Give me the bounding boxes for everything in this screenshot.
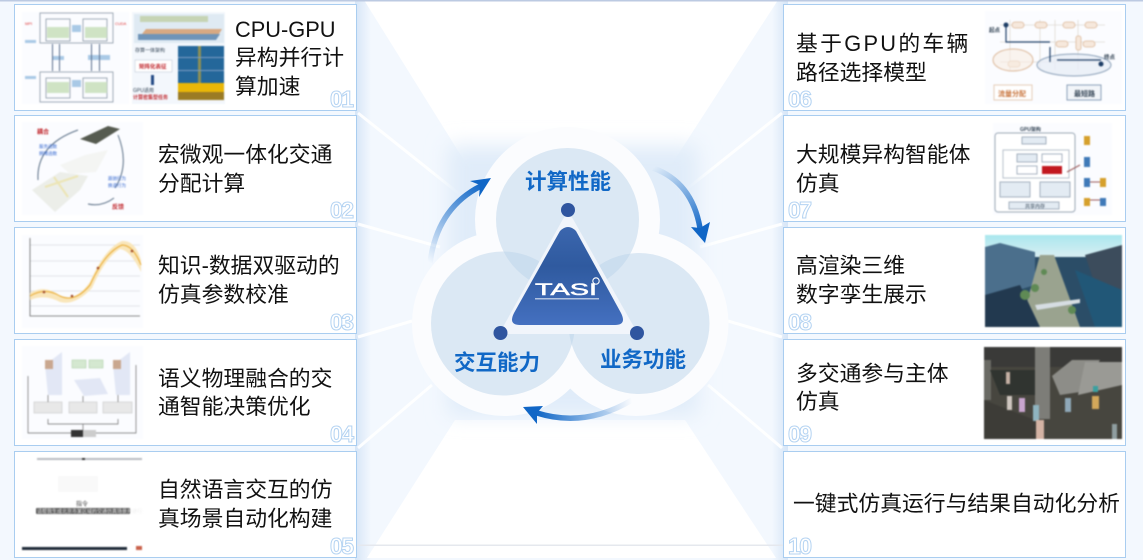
text 07: 仿真 xyxy=(796,171,840,196)
thumbnail 09 xyxy=(984,347,1122,439)
text 04: 通智能决策优化 xyxy=(158,394,311,419)
text 07: 大规模异构智能体 xyxy=(796,142,970,167)
thumbnail 01: 计算密集型任务 xyxy=(133,94,168,101)
thumbnail 01: 存算一体架构 xyxy=(135,47,165,54)
arrow: bottom arc xyxy=(523,399,629,424)
thumbnail 07 xyxy=(993,123,1112,215)
thumbnail 01: 矩阵化表征 xyxy=(139,62,167,70)
text 01: 异构并行计 xyxy=(235,45,344,70)
circle: computing xyxy=(496,148,639,291)
thumbnail 04 xyxy=(22,346,143,439)
thumbnail 01: CUDA xyxy=(115,21,127,26)
text 03: 知识-数据双驱动的 xyxy=(158,253,340,278)
circle: interaction xyxy=(431,252,575,396)
thumbnail 05 xyxy=(22,457,143,550)
text 02 xyxy=(158,142,332,196)
node: top xyxy=(561,203,575,217)
text 08 xyxy=(796,253,927,307)
text 07 xyxy=(796,142,970,196)
text 03: 仿真参数校准 xyxy=(158,282,289,307)
text 06: 路径选择模型 xyxy=(796,60,927,85)
number 06: 06 xyxy=(788,86,811,112)
thumbnail 02: 跟驰行为 xyxy=(108,175,126,182)
text 08: 高渲染三维 xyxy=(796,253,905,278)
node: left xyxy=(494,326,508,340)
text 03 xyxy=(158,253,340,307)
panel: 03 xyxy=(14,227,356,334)
number 10: 10 xyxy=(788,533,811,559)
panel: 10 xyxy=(783,450,1126,558)
text 05: 真场景自动化构建 xyxy=(158,506,332,531)
arrow: left arc xyxy=(428,178,491,260)
number 08: 08 xyxy=(788,309,811,335)
text 05 xyxy=(158,477,332,531)
white discs xyxy=(412,127,728,416)
thumbnail 06 xyxy=(985,11,1122,104)
thumbnail 01: GPU适用 xyxy=(133,87,154,94)
text 08: 数字孪生展示 xyxy=(796,282,927,307)
text 01 xyxy=(235,16,344,99)
logo loop xyxy=(593,278,599,284)
thumbnail 01: MPI xyxy=(25,21,32,26)
thumbnail 02: 耦合 xyxy=(37,128,49,136)
panel: 09 xyxy=(783,339,1126,446)
triangle: logo panel xyxy=(512,227,623,325)
label: computing: 计算性能 xyxy=(525,170,611,194)
thumbnail 06: 流量分配 xyxy=(998,89,1026,98)
text 01: CPU-GPU xyxy=(235,16,336,42)
text 05: 自然语言交互的仿 xyxy=(158,477,332,502)
number 03: 03 xyxy=(330,309,353,335)
triangle frame xyxy=(502,216,635,334)
number 04: 04 xyxy=(330,421,353,447)
panel: 02 xyxy=(14,115,356,222)
number 01: 01 xyxy=(330,86,353,112)
panel: 05 xyxy=(14,450,356,558)
number 02: 02 xyxy=(330,197,353,223)
panel: 04 xyxy=(14,339,356,446)
thumbnail 02 xyxy=(22,122,143,215)
text 06: 基于GPU的车辆 xyxy=(796,31,971,56)
logo text TASI: TASI xyxy=(535,280,597,299)
thumbnail 06: 起点 xyxy=(989,26,1001,34)
text 02: 宏微观一体化交通 xyxy=(158,142,332,167)
text 01: 算加速 xyxy=(235,74,300,99)
panel: 01 xyxy=(14,4,356,111)
text 09 xyxy=(796,360,949,414)
label: service: 业务功能 xyxy=(600,348,686,372)
thumbnail 02: 反馈 xyxy=(112,203,124,211)
text 10: 一键式仿真运行与结果自动化分析 xyxy=(793,491,1120,516)
thumbnail 08 xyxy=(985,235,1122,327)
text 09: 多交通参与主体 xyxy=(796,360,949,386)
text 06 xyxy=(796,31,971,85)
panel: 07 xyxy=(783,115,1126,222)
number 09: 09 xyxy=(788,421,811,447)
thumbnail 06: 终点 xyxy=(1104,53,1116,61)
text 09: 仿真 xyxy=(796,389,840,414)
thumbnail 07: 共享内存 xyxy=(1025,203,1045,210)
thumbnail 03 xyxy=(22,235,143,328)
thumbnail 05: 指令 xyxy=(76,500,88,508)
venn diagram core xyxy=(424,142,722,416)
number 05: 05 xyxy=(330,533,353,559)
logo subtitle strip xyxy=(535,298,599,300)
text 02: 分配计算 xyxy=(158,171,245,196)
label: interaction: 交互能力 xyxy=(454,351,540,375)
thumbnail 07: GPU架构 xyxy=(1020,126,1041,133)
thumbnail 02: 服务函数 xyxy=(39,143,57,150)
text 04 xyxy=(158,366,332,419)
thumbnail 06: 最短路 xyxy=(1074,89,1095,98)
circle: service xyxy=(568,253,710,394)
thumbnail 02: 拥堵函数 xyxy=(39,150,57,157)
thumbnail 02: 换道行为 xyxy=(108,182,126,189)
node: right xyxy=(630,326,644,340)
text 04: 语义物理融合的交 xyxy=(158,366,332,390)
panel: 08 xyxy=(783,227,1126,334)
arrow: right arc xyxy=(654,168,710,243)
thumbnail 01 xyxy=(22,12,225,104)
panel: 06 xyxy=(783,4,1126,111)
number 07: 07 xyxy=(788,197,811,223)
